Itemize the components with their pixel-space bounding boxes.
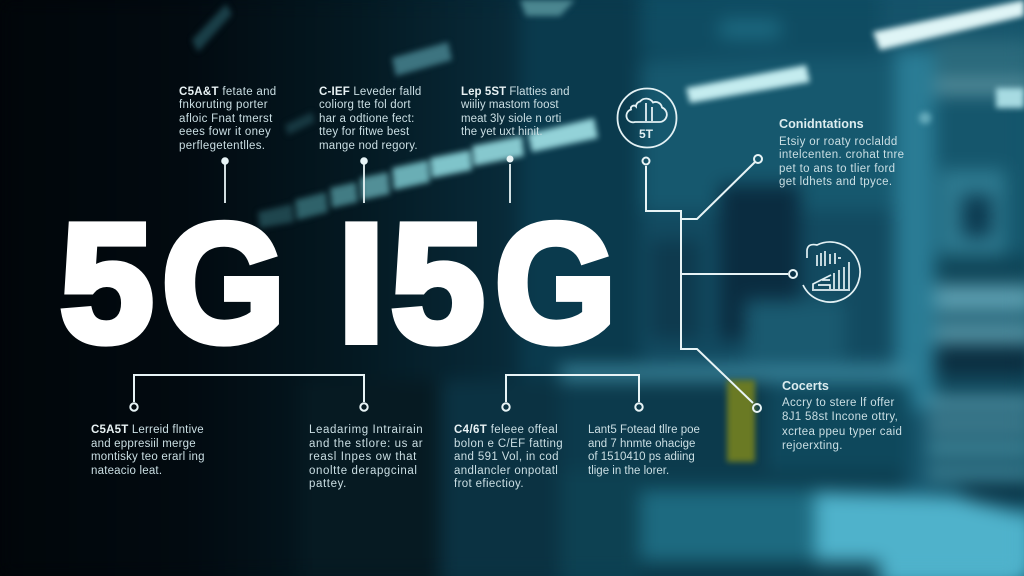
text block: top right — [461, 86, 570, 138]
text block: bottom 2: and the stlore: us ar — [309, 438, 423, 450]
top connectors — [222, 156, 512, 203]
text block: conditions — [779, 117, 904, 188]
text: conditions body — [779, 136, 904, 188]
text block: bottom 1 — [91, 424, 205, 477]
icon: cloud 5G: 5T — [639, 127, 654, 141]
text block: bottom 3: andlancler onpotatl — [454, 465, 558, 477]
text: conditions body: intelcenten. crohat tnre — [779, 149, 904, 161]
text block: top middle: mange nod regory. — [319, 140, 418, 152]
text block: bottom 3: and 591 Vol, in cod — [454, 451, 559, 463]
title: 5G I5G: I — [338, 189, 385, 377]
text block: bottom 2: pattey. — [309, 478, 347, 490]
text block: top right: meat 3ly siole n orti — [461, 113, 561, 125]
text block: top middle: coliorg tte fol dort — [319, 99, 411, 111]
text block: bottom 4 — [588, 424, 700, 477]
text: conditions body: get ldhets and tpyce. — [779, 176, 892, 188]
text block: bottom 4: and 7 hnmte ohacige — [588, 438, 695, 450]
text block: top left: eees fowr it oney — [179, 126, 271, 138]
text block: bottom 4: tlige in the lorer. — [588, 465, 669, 477]
text: conditions body: pet to ans to tlier ford — [779, 163, 895, 175]
text block: bottom 1: C5A5T Lerreid flntive — [91, 424, 204, 436]
text: concerts body: xcrtea ppeu typer caid — [782, 426, 902, 438]
text block: top middle: ttey for fitwe best — [319, 126, 409, 138]
text block: top left: fnkoruting porter — [179, 99, 268, 111]
text block: top right: wiiliy mastom foost — [461, 99, 559, 111]
text block: concerts — [782, 379, 902, 452]
title: 5G I5G: 5 — [60, 189, 153, 377]
text block: top right: Lep 5ST Flatties and — [461, 86, 570, 98]
text: concerts body — [782, 397, 902, 452]
title: 5G I5G: G — [495, 189, 616, 377]
text: conditions body: Etsiy or roaty roclaldd — [779, 136, 898, 148]
text: concerts body: rejoerxting. — [782, 440, 843, 452]
text block: bottom 2: Leadarimg Intrairain — [309, 424, 423, 436]
text block: bottom 3: C4/6T feleee offeal — [454, 424, 558, 436]
text block: bottom 1: and eppresiil merge — [91, 438, 196, 450]
text block: bottom 3: bolon e C/EF fatting — [454, 438, 563, 450]
bottom left bracket — [130, 375, 368, 411]
text block: bottom 4: of 1510410 ps adiing — [588, 451, 695, 463]
heading: conditions: Conidntations — [779, 117, 864, 131]
text block: bottom 1: nateacio leat. — [91, 465, 162, 477]
text block: bottom 1: montisky teo erarl ing — [91, 451, 205, 463]
heading: concerts: Cocerts — [782, 379, 829, 393]
bottom right bracket — [502, 375, 643, 411]
text block: bottom 2 — [309, 424, 423, 490]
title: 5G I5G: 5 — [391, 189, 484, 377]
right branching connector — [642, 155, 797, 412]
text: concerts body: Accry to stere lf offer — [782, 397, 895, 409]
text block: top middle — [319, 86, 422, 152]
title: 5G I5G: G — [162, 189, 285, 377]
text block: bottom 3: frot efiectioy. — [454, 478, 524, 490]
text block: top middle: C-IEF Leveder falld — [319, 86, 422, 98]
text block: bottom 3 — [454, 424, 563, 490]
text block: top left: perflegetentlles. — [179, 140, 265, 152]
text block: top right: the yet uxt hinit. — [461, 126, 543, 138]
text block: bottom 4: Lant5 Fotead tllre poe — [588, 424, 700, 436]
text block: bottom 2: reasl Inpes ow that — [309, 451, 417, 463]
text block: top left: C5A&T fetate and — [179, 86, 276, 98]
text block: bottom 2: onoltte derapgcinal — [309, 465, 418, 477]
text block: top middle: har a odtione fect: — [319, 113, 414, 125]
text block: top left: afloic Fnat tmerst — [179, 113, 273, 125]
text block: top left — [179, 86, 276, 152]
text: concerts body: 8J1 58st Incone ottry, — [782, 411, 898, 423]
